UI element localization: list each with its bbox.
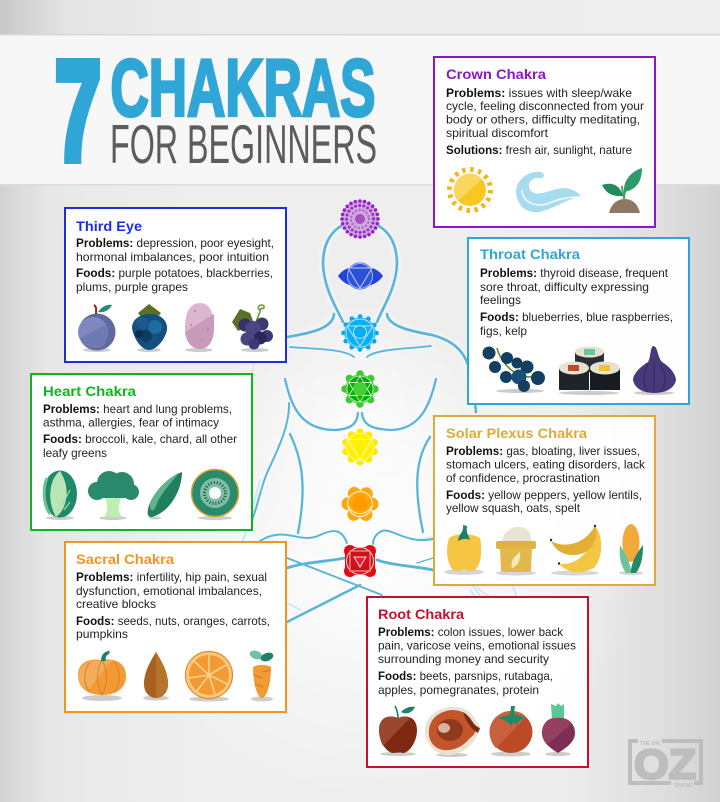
text: throat details: figs, kelp xyxy=(480,325,527,338)
icon: sun xyxy=(450,170,490,210)
icon: sushi xyxy=(559,346,620,395)
text: third eye details: Foods: purple potatoes, blackberries, xyxy=(76,267,273,280)
chakra: solar plexus xyxy=(341,428,379,466)
chakra: third eye xyxy=(338,262,383,290)
icon: tomato xyxy=(490,706,532,756)
panel: throat chakra xyxy=(468,238,689,404)
icon: kiwi xyxy=(192,470,238,520)
icon: almond xyxy=(143,652,169,700)
icon: apple xyxy=(379,706,417,756)
title: numeral 7: 7 xyxy=(55,32,101,190)
chakra: sacral xyxy=(347,491,373,517)
logo text: oz: OZ xyxy=(634,740,696,788)
icon: wind wave xyxy=(516,172,581,212)
logo text: show: SHOW xyxy=(674,783,693,789)
icon: purple potato xyxy=(185,303,214,352)
text: third eye details: hormonal imbalances, poor intuition xyxy=(76,251,269,264)
text: root details: apples, pomegranates, protein xyxy=(378,684,539,697)
text: third eye details: plums, purple grapes xyxy=(76,281,188,294)
icon: yellow pepper xyxy=(444,525,484,575)
panel: root chakra xyxy=(367,597,588,767)
text: heart details: asthma, allergies, fear of intimacy xyxy=(43,416,219,430)
icon: grapes xyxy=(232,305,273,352)
text: sacral details xyxy=(76,571,270,641)
text: root details: surrounding money and security xyxy=(378,653,549,666)
text: solar plexus details: of confidence, procrastination xyxy=(446,472,600,485)
text: heart details: leafy greens xyxy=(43,447,107,460)
text: sacral details: pumpkins xyxy=(76,628,128,641)
chakra: heart xyxy=(345,374,375,404)
icon: orange slice xyxy=(186,652,232,702)
title: FOR BEGINNERS: FOR BEGINNERS xyxy=(110,113,377,175)
text: solar plexus details: yellow squash, oats, spelt xyxy=(446,502,581,515)
heading: sacral: Sacral Chakra xyxy=(76,551,174,567)
heading: heart: Heart Chakra xyxy=(43,383,136,399)
chakra: crown xyxy=(342,201,378,237)
heading: crown: Crown Chakra xyxy=(446,66,546,82)
text: throat details: feelings xyxy=(480,294,521,307)
body outline xyxy=(185,226,516,643)
panel: solar plexus chakra xyxy=(434,416,655,585)
text: crown details xyxy=(446,87,644,157)
icon: corn xyxy=(619,524,643,575)
heading: third eye: Third Eye xyxy=(76,218,142,234)
heading: solar plexus: Solar Plexus Chakra xyxy=(446,425,587,441)
text: throat details: Problems: thyroid disease, frequent xyxy=(480,267,669,280)
icon: pumpkin xyxy=(78,651,126,701)
icon: beet xyxy=(542,703,575,756)
text: root details xyxy=(378,626,576,697)
panel: sacral chakra xyxy=(65,542,286,712)
icon: plum xyxy=(78,305,116,352)
icon: fig xyxy=(633,346,676,395)
icon: sprout xyxy=(602,168,642,213)
text: root details: pain, varicose veins, emotional issues xyxy=(378,640,576,652)
text: solar plexus details: Problems: gas, bloating, liver issues, xyxy=(446,445,640,458)
icon: bananas xyxy=(550,525,601,576)
text: solar plexus details: stomach ulcers, eating disorders, lack xyxy=(446,458,645,472)
text: solar plexus details: Foods: yellow peppers, yellow lentils, xyxy=(446,489,642,502)
logo text: the dr.: THE DR. xyxy=(640,741,661,747)
text: third eye details: Problems: depression, poor eyesight, xyxy=(76,237,274,250)
text: sacral details: Foods: seeds, nuts, oranges, carrots, xyxy=(76,615,270,628)
heading: root: Root Chakra xyxy=(378,606,464,622)
title xyxy=(55,32,377,190)
icon: meat xyxy=(425,707,480,757)
title: CHAKRAS: CHAKRAS xyxy=(110,44,376,134)
text: heart details: Foods: broccoli, kale, chard, all other xyxy=(43,433,237,446)
panel: crown chakra xyxy=(434,57,655,227)
text: root details: Foods: beets, parsnips, rutabaga, xyxy=(378,670,553,683)
icon: blueberries xyxy=(482,346,545,393)
text: solar plexus details xyxy=(446,445,645,515)
icon: blackberry xyxy=(132,304,167,352)
text: crown details: Solutions: fresh air, sunlight, nature xyxy=(446,144,632,157)
panel: third eye xyxy=(65,208,286,362)
chakra: throat xyxy=(344,316,376,350)
logo: the dr. oz show xyxy=(628,739,703,789)
icon: lettuce xyxy=(43,470,77,520)
text: root details: Problems: colon issues, lower back xyxy=(378,626,563,639)
text: third eye details xyxy=(76,237,274,294)
text: crown details: body or others, difficulty meditating, xyxy=(446,114,640,126)
text: throat details: Foods: blueberries, blue raspberries, xyxy=(480,311,673,324)
panel: heart chakra xyxy=(31,374,252,530)
chakra: root xyxy=(344,545,376,577)
icon: broccoli xyxy=(88,471,139,520)
text: crown details: Problems: issues with sleep/wake xyxy=(446,87,632,100)
text: throat details xyxy=(480,267,673,338)
text: crown details: cycle, feeling disconnected from your xyxy=(446,100,644,113)
text: heart details: Problems: heart and lung problems, xyxy=(43,403,232,416)
heading: throat: Throat Chakra xyxy=(480,246,580,262)
icon: pea pod xyxy=(148,472,182,520)
text: sacral details: creative blocks xyxy=(76,598,156,611)
text: sacral details: dysfunction, emotional imbalances, xyxy=(76,585,262,598)
text: throat details: sore throat, difficulty expressing xyxy=(480,281,649,294)
icon: carrot xyxy=(249,649,274,702)
text: heart details xyxy=(43,403,237,460)
icon: lentils bag xyxy=(496,527,536,576)
text: crown details: spiritual discomfort xyxy=(446,127,549,140)
text: sacral details: Problems: infertility, hip pain, sexual xyxy=(76,571,267,584)
